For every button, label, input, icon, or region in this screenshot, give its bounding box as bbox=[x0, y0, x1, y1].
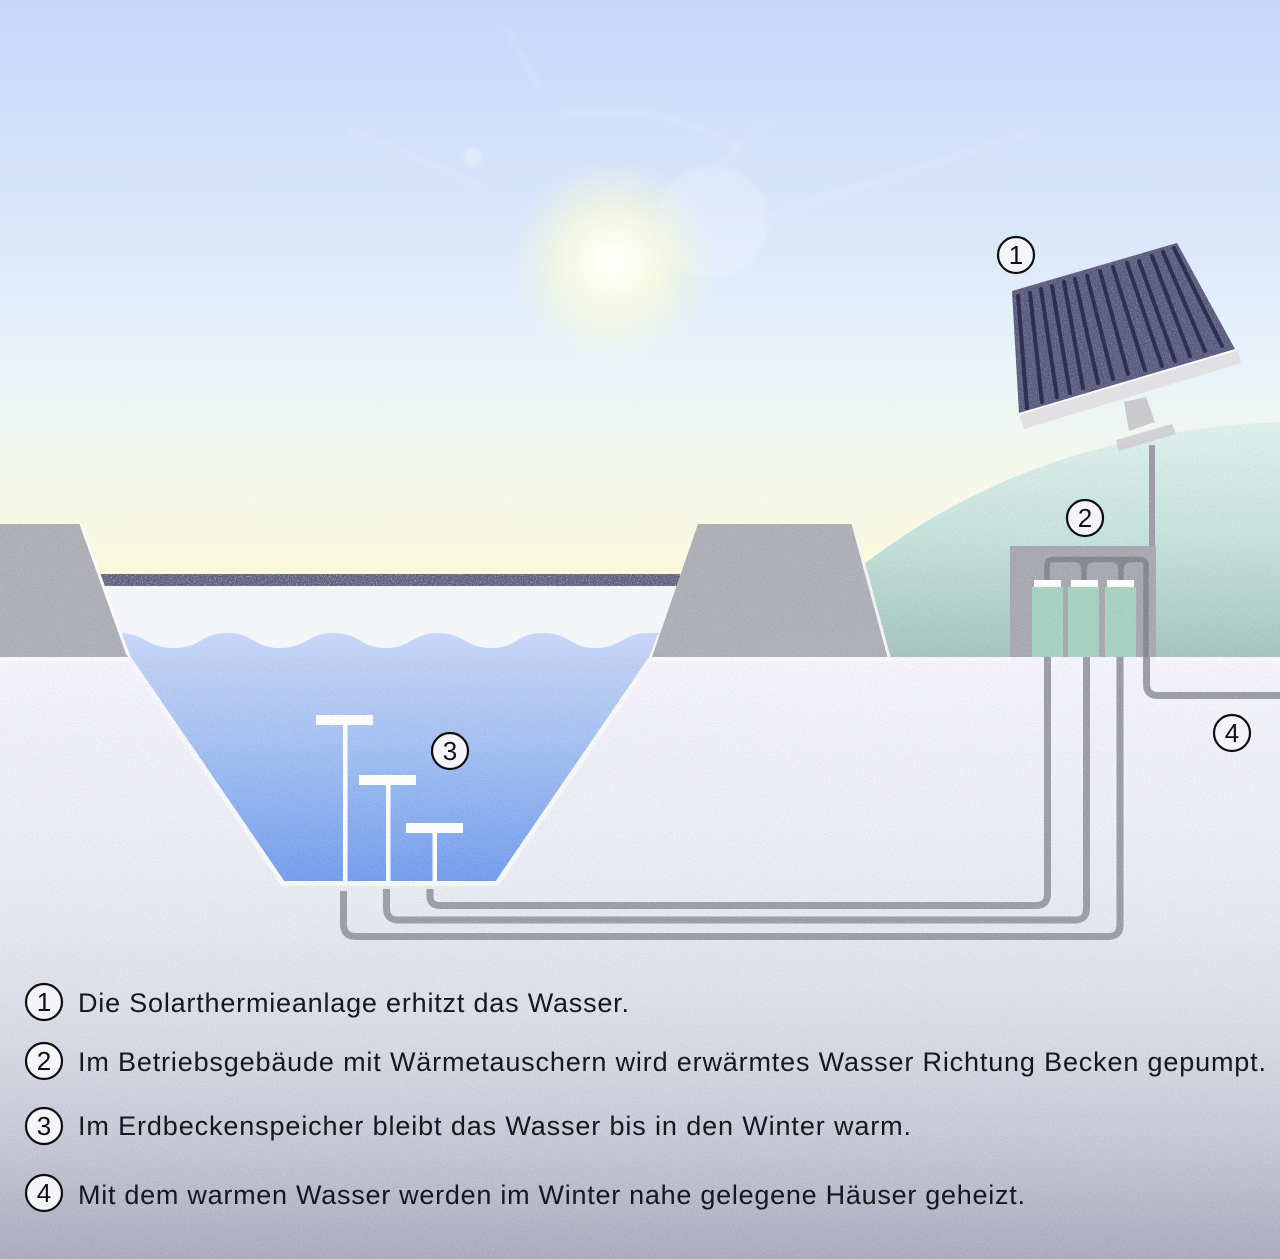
heat exchanger tanks bbox=[1032, 587, 1136, 657]
right embankment bbox=[652, 524, 888, 657]
ground bbox=[0, 657, 1280, 1259]
legend item 4: Mit dem warmen Wasser werden im Winter nahe gelegene Häuser geheizt. bbox=[78, 1180, 1025, 1210]
badge 4 on pipe: 4 bbox=[1225, 718, 1239, 748]
badge 1 on collector: 1 bbox=[1009, 240, 1023, 270]
inner pipes bbox=[1047, 560, 1146, 657]
legend item 3: 3 bbox=[37, 1111, 51, 1141]
legend item 2: Im Betriebsgebäude mit Wärmetauschern wird erwärmtes Wasser Richtung Becken gepumpt. bbox=[78, 1047, 1266, 1077]
pipe from solar panel to building bbox=[1149, 445, 1155, 546]
sky background bbox=[0, 0, 1280, 660]
film grain over ground, hill and embankments bbox=[0, 420, 1280, 1259]
badge 3 on basin: 3 bbox=[443, 736, 457, 766]
legend bbox=[26, 984, 1266, 1211]
left embankment bbox=[0, 524, 128, 657]
dark strip: basin cover bbox=[100, 574, 680, 586]
badge 4 on pipe bbox=[1214, 715, 1250, 751]
pipes from basin to building bbox=[344, 657, 1120, 936]
badge 2 on building: 2 bbox=[1078, 503, 1092, 533]
legend item 1: 1 bbox=[37, 987, 51, 1017]
tank caps bbox=[1034, 580, 1134, 587]
legend item 2: 2 bbox=[37, 1046, 51, 1076]
legend item 1: Die Solarthermieanlage erhitzt das Wasser. bbox=[78, 988, 629, 1018]
legend item 3: Im Erdbeckenspeicher bleibt das Wasser bis in den Winter warm. bbox=[78, 1111, 911, 1141]
operations building with heat exchangers bbox=[1010, 546, 1156, 657]
T-shaped diffusers in the water bbox=[316, 715, 463, 882]
basin back wall bbox=[100, 586, 680, 660]
district heating pipe bbox=[1146, 657, 1280, 696]
green hill bbox=[860, 422, 1280, 660]
badge 3 on basin bbox=[432, 733, 468, 769]
solar thermal collector bbox=[1005, 240, 1241, 451]
sun with lens flare bbox=[350, 25, 1040, 366]
water basin with waves bbox=[118, 633, 660, 884]
badge 2 on building bbox=[1067, 500, 1103, 536]
legend item 4: 4 bbox=[37, 1178, 51, 1208]
badge 1 on collector bbox=[998, 237, 1034, 273]
